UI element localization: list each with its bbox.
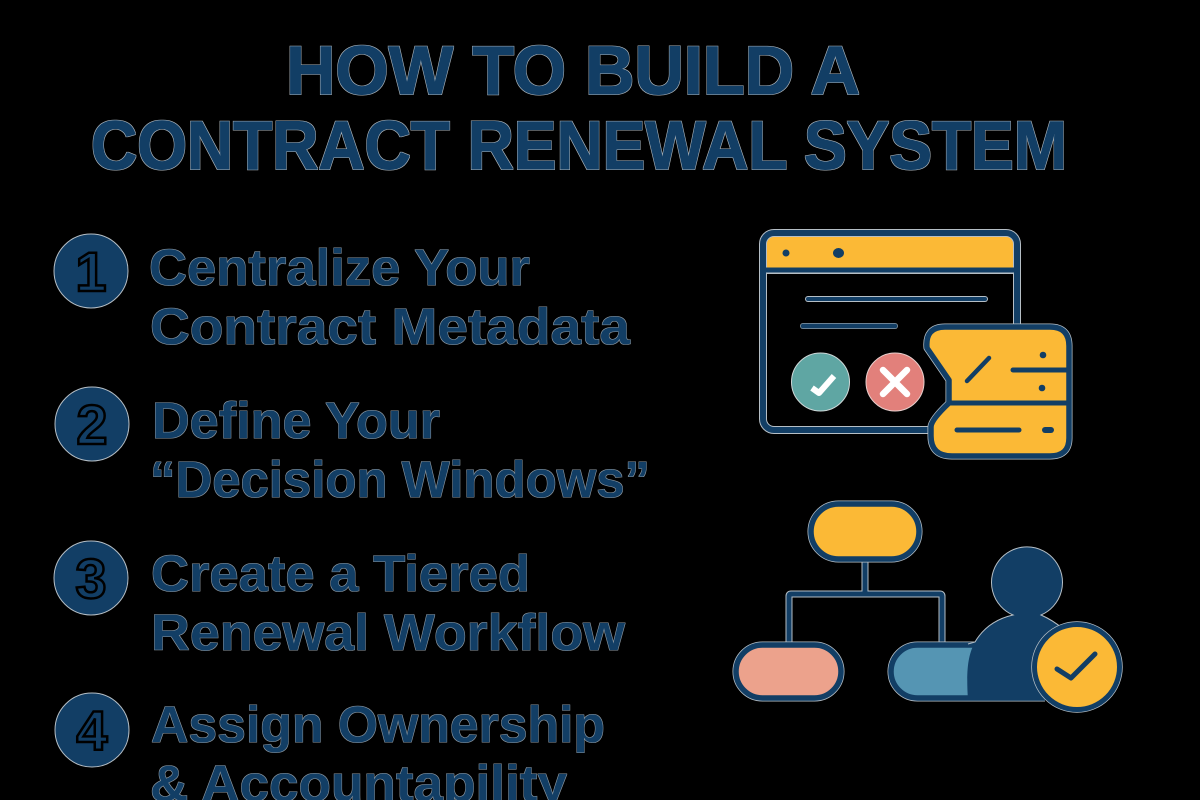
step 1 bbox=[54, 234, 631, 355]
step 3 text bbox=[151, 545, 625, 661]
step 4 text: Assign Ownership bbox=[151, 696, 605, 753]
icon: workflow with owner bbox=[736, 504, 1120, 710]
step 1 text: Centralize Your bbox=[149, 239, 530, 296]
step 2 text bbox=[150, 392, 650, 508]
step 2 text: “Decision Windows” bbox=[150, 451, 650, 508]
person silhouette bbox=[967, 547, 1085, 700]
window text lines bbox=[803, 299, 985, 326]
title: CONTRACT RENEWAL SYSTEM bbox=[91, 107, 1067, 184]
step 1 text: Contract Metadata bbox=[150, 298, 631, 355]
database stack bbox=[927, 327, 1069, 456]
title: HOW TO BUILD A bbox=[286, 32, 860, 109]
right blue node bbox=[891, 645, 1045, 698]
step 3 number badge: 3 bbox=[75, 547, 107, 610]
icon: contract window with database bbox=[763, 233, 1069, 456]
step 4 number badge bbox=[55, 693, 129, 767]
icon: reject cross bbox=[866, 353, 924, 411]
step 1 text bbox=[149, 239, 631, 355]
top yellow node bbox=[811, 504, 919, 559]
title bbox=[91, 32, 1067, 184]
step 3 text: Create a Tiered bbox=[151, 545, 530, 602]
step 1 number badge: 1 bbox=[75, 240, 107, 303]
step 3 number badge bbox=[54, 541, 128, 615]
connector lines bbox=[789, 560, 942, 645]
step 3 text: Renewal Workflow bbox=[151, 604, 625, 661]
step 4 number badge: 4 bbox=[76, 699, 108, 762]
step 2 text: Define Your bbox=[152, 392, 440, 449]
step 3 bbox=[54, 541, 625, 661]
step 4 bbox=[55, 693, 605, 800]
window frame bbox=[763, 233, 1017, 430]
step 2 bbox=[55, 387, 650, 508]
step 2 number badge bbox=[55, 387, 129, 461]
left salmon node bbox=[736, 645, 841, 698]
yellow check badge bbox=[1034, 624, 1120, 710]
step 1 number badge bbox=[54, 234, 128, 308]
icon: approve check bbox=[792, 353, 850, 411]
step 4 text bbox=[150, 696, 605, 800]
step 2 number badge: 2 bbox=[76, 393, 108, 456]
